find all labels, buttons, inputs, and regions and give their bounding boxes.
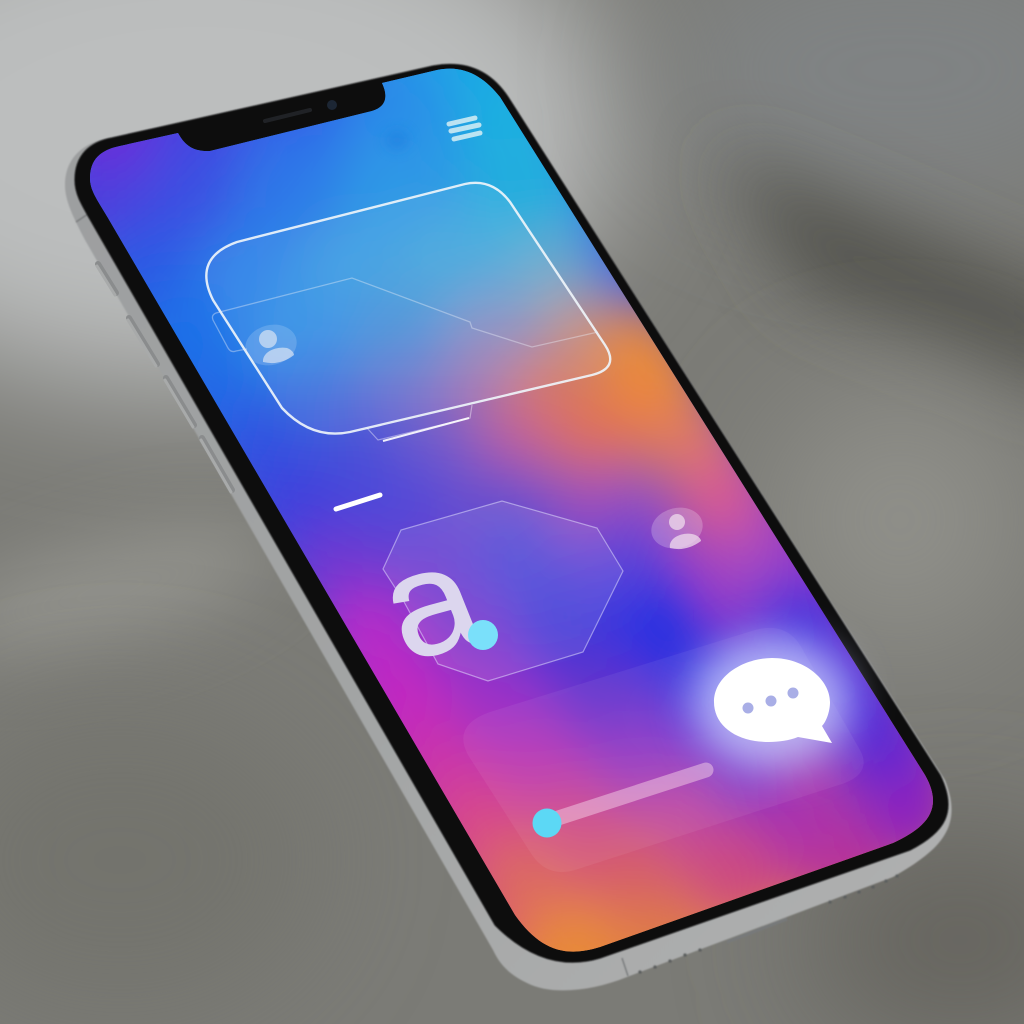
- icon: profile avatar right: [647, 502, 707, 554]
- short white dash: [336, 495, 380, 509]
- slider knob: [532, 808, 562, 838]
- typing dots: [742, 688, 798, 714]
- side buttons: [97, 264, 232, 492]
- cyan dot: [468, 620, 498, 650]
- speaker and camera: [265, 100, 337, 121]
- faint smudge: [390, 136, 404, 146]
- screen: [90, 68, 933, 952]
- slider track: [552, 770, 706, 820]
- icon: profile avatar in card: [241, 319, 301, 371]
- phone body: [65, 65, 952, 990]
- glass card: [206, 183, 610, 441]
- octagon panel: [383, 501, 623, 681]
- icon: chat bubble: [692, 636, 852, 768]
- phone: [64, 62, 952, 991]
- screen gradient: [90, 68, 933, 952]
- black bezel: [75, 64, 948, 962]
- inner folder outline: [212, 278, 598, 352]
- card base tab: [367, 405, 472, 441]
- icon: menu: [449, 118, 480, 139]
- letter a: a: [355, 512, 504, 691]
- lower translucent card: [463, 628, 864, 872]
- frame seams and speaker holes: [76, 214, 787, 976]
